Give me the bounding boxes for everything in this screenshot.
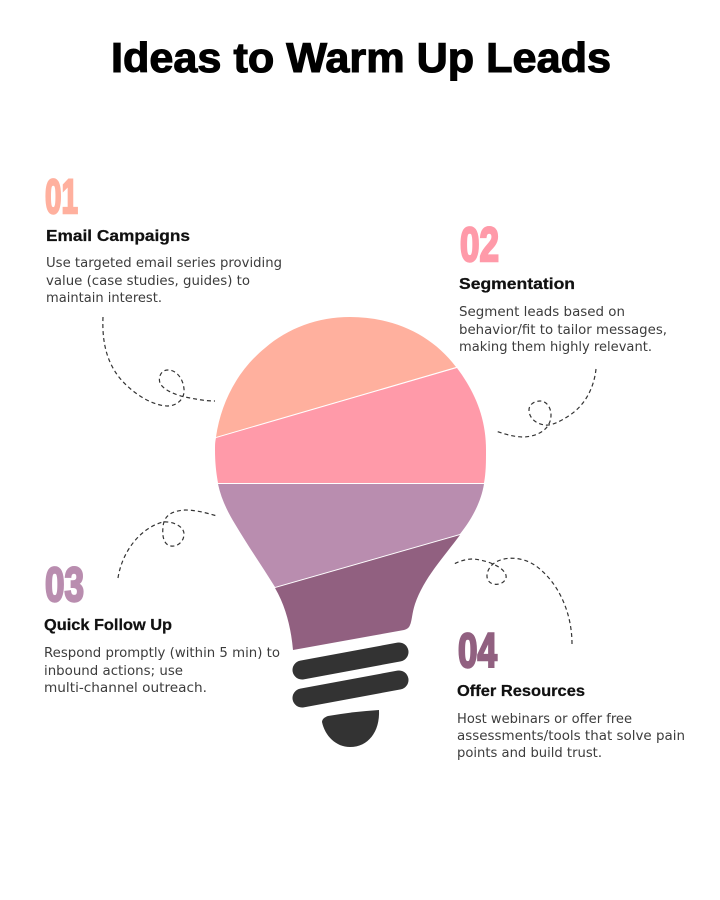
panel: offer resources [457, 625, 685, 761]
body text: offer resources [457, 712, 685, 761]
body text: quick follow up: Respond promptly (within 5 min) to [44, 646, 280, 661]
body text: email campaigns: maintain interest. [46, 291, 162, 306]
body text: segmentation: making them highly relevant. [459, 340, 652, 355]
number 02: 02 [460, 219, 499, 272]
body text: email campaigns: value (case studies, guides) to [46, 274, 250, 289]
heading: segmentation: Segmentation [459, 276, 575, 293]
body text: offer resources: points and build trust. [457, 746, 602, 761]
body text: segmentation [459, 305, 667, 355]
arrow: dashed connector 3 [118, 510, 217, 578]
panel: email campaigns [45, 171, 282, 306]
body text: quick follow up [44, 646, 280, 696]
bulb segment 3: mauve [218, 484, 484, 587]
body text: quick follow up: inbound actions; use [44, 664, 183, 679]
arrow: dashed connector 1 [103, 317, 215, 406]
body text: segmentation: Segment leads based on [459, 305, 625, 320]
body text: email campaigns [46, 256, 282, 306]
heading: quick follow up: Quick Follow Up [44, 617, 172, 634]
heading: email campaigns: Email Campaigns [46, 228, 190, 245]
arrow: dashed connector 4 [454, 558, 572, 644]
body text: segmentation: behavior/fit to tailor messages, [459, 323, 667, 338]
body text: email campaigns: Use targeted email series providing [46, 256, 282, 271]
illustration: light bulb [215, 317, 486, 747]
number 01: 01 [45, 171, 78, 224]
title: Ideas to Warm Up Leads [111, 34, 611, 81]
arrow: dashed connector 2 [496, 369, 596, 437]
body text: offer resources: assessments/tools that solve pain [457, 729, 685, 744]
body text: quick follow up: multi-channel outreach. [44, 681, 207, 696]
bulb segment 2: pink [215, 368, 486, 483]
bulb base [322, 710, 379, 747]
number 03: 03 [45, 559, 84, 612]
panel: quick follow up [44, 559, 280, 696]
panel: segmentation [459, 219, 667, 355]
bulb segment 4: plum [275, 535, 460, 650]
screw thread 1 [302, 652, 399, 670]
heading: offer resources: Offer Resources [457, 683, 585, 700]
screw thread 2 [302, 680, 399, 698]
bulb segment 1: peach [216, 317, 456, 437]
body text: offer resources: Host webinars or offer free [457, 712, 632, 727]
number 04: 04 [458, 625, 497, 678]
